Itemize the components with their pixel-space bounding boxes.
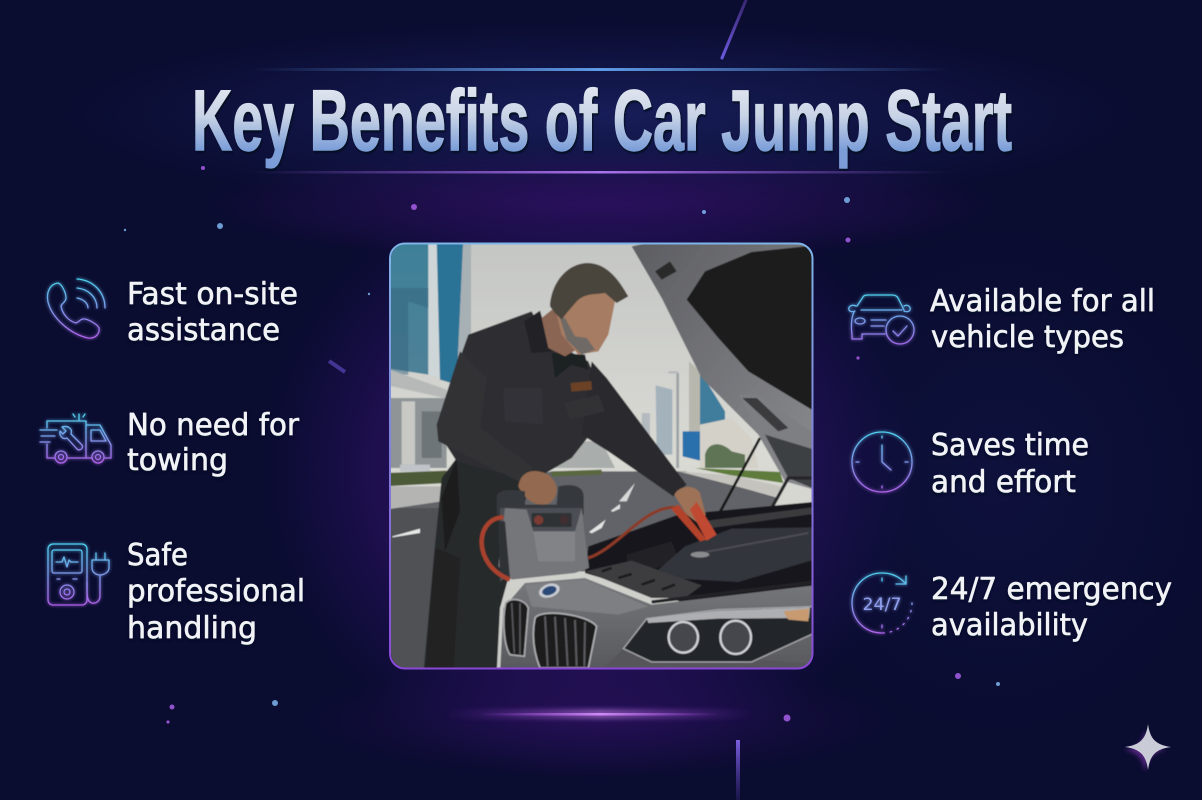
text: professional bbox=[127, 574, 305, 609]
torso bbox=[446, 311, 592, 474]
text bbox=[127, 408, 300, 478]
engine bay bbox=[585, 501, 820, 603]
far hand bbox=[674, 487, 706, 525]
left towers bbox=[391, 244, 429, 375]
icon: car with check badge bbox=[849, 295, 914, 344]
text: Available for all bbox=[930, 284, 1155, 319]
right benefit: available for all vehicle types bbox=[849, 284, 1155, 355]
text: Fast on-site bbox=[127, 277, 298, 312]
clamps bbox=[671, 505, 707, 541]
car body bbox=[500, 578, 820, 674]
icon: phone bbox=[47, 279, 105, 338]
kidney grille bbox=[504, 599, 528, 656]
panel backing bbox=[389, 243, 813, 669]
arm far bbox=[582, 361, 687, 496]
photo panel: technician jump starting a car bbox=[385, 238, 820, 674]
legs bbox=[423, 458, 532, 674]
engine cover bbox=[658, 527, 820, 582]
road bbox=[385, 471, 778, 571]
collar and pockets bbox=[524, 311, 552, 353]
text: No need for bbox=[127, 408, 300, 443]
icon: clock bbox=[852, 432, 912, 492]
photo illustration bbox=[385, 238, 820, 674]
text: handling bbox=[127, 611, 257, 646]
text: 24/7 emergency bbox=[931, 572, 1172, 607]
text: vehicle types bbox=[931, 320, 1124, 355]
icon: sparkle star bbox=[1123, 724, 1171, 773]
text bbox=[127, 538, 305, 646]
arm near bbox=[436, 351, 520, 481]
text: assistance bbox=[127, 313, 280, 348]
strut bbox=[719, 437, 762, 512]
distant city bbox=[552, 441, 615, 468]
headlight bbox=[623, 606, 820, 662]
icon: service van bbox=[40, 414, 111, 463]
text bbox=[931, 428, 1089, 500]
icon: 24/7 clock: 24/7 bbox=[862, 595, 902, 615]
left benefit: safe professional handling bbox=[48, 538, 305, 646]
panel border bbox=[390, 244, 812, 668]
hood bbox=[632, 238, 820, 491]
text bbox=[127, 277, 298, 348]
text bbox=[931, 572, 1172, 643]
text: towing bbox=[127, 443, 228, 478]
right benefit: saves time and effort bbox=[852, 428, 1089, 500]
bottom glow rule bbox=[445, 709, 755, 719]
text: availability bbox=[931, 608, 1088, 643]
left benefit: no need for towing bbox=[40, 408, 300, 478]
icon: 24/7 clock bbox=[852, 573, 912, 633]
logo patch bbox=[571, 381, 592, 392]
text bbox=[930, 284, 1155, 355]
text: and effort bbox=[931, 465, 1076, 500]
icon: multimeter and plug bbox=[48, 544, 109, 605]
title rule top bbox=[250, 68, 950, 71]
right benefit: 24/7 emergency availability bbox=[852, 572, 1172, 643]
left benefit: fast on-site assistance bbox=[47, 277, 298, 348]
neck and head bbox=[541, 309, 576, 357]
text: Safe bbox=[127, 538, 188, 573]
overpass bbox=[385, 398, 447, 468]
jump pack bbox=[497, 485, 589, 581]
text: Saves time bbox=[931, 428, 1089, 463]
decorative particles and streaks bbox=[124, 0, 1000, 800]
title rule bottom bbox=[250, 171, 950, 174]
badge bbox=[538, 583, 560, 598]
cowl bbox=[585, 561, 702, 598]
red cables bbox=[482, 517, 510, 580]
near hand bbox=[518, 471, 557, 505]
